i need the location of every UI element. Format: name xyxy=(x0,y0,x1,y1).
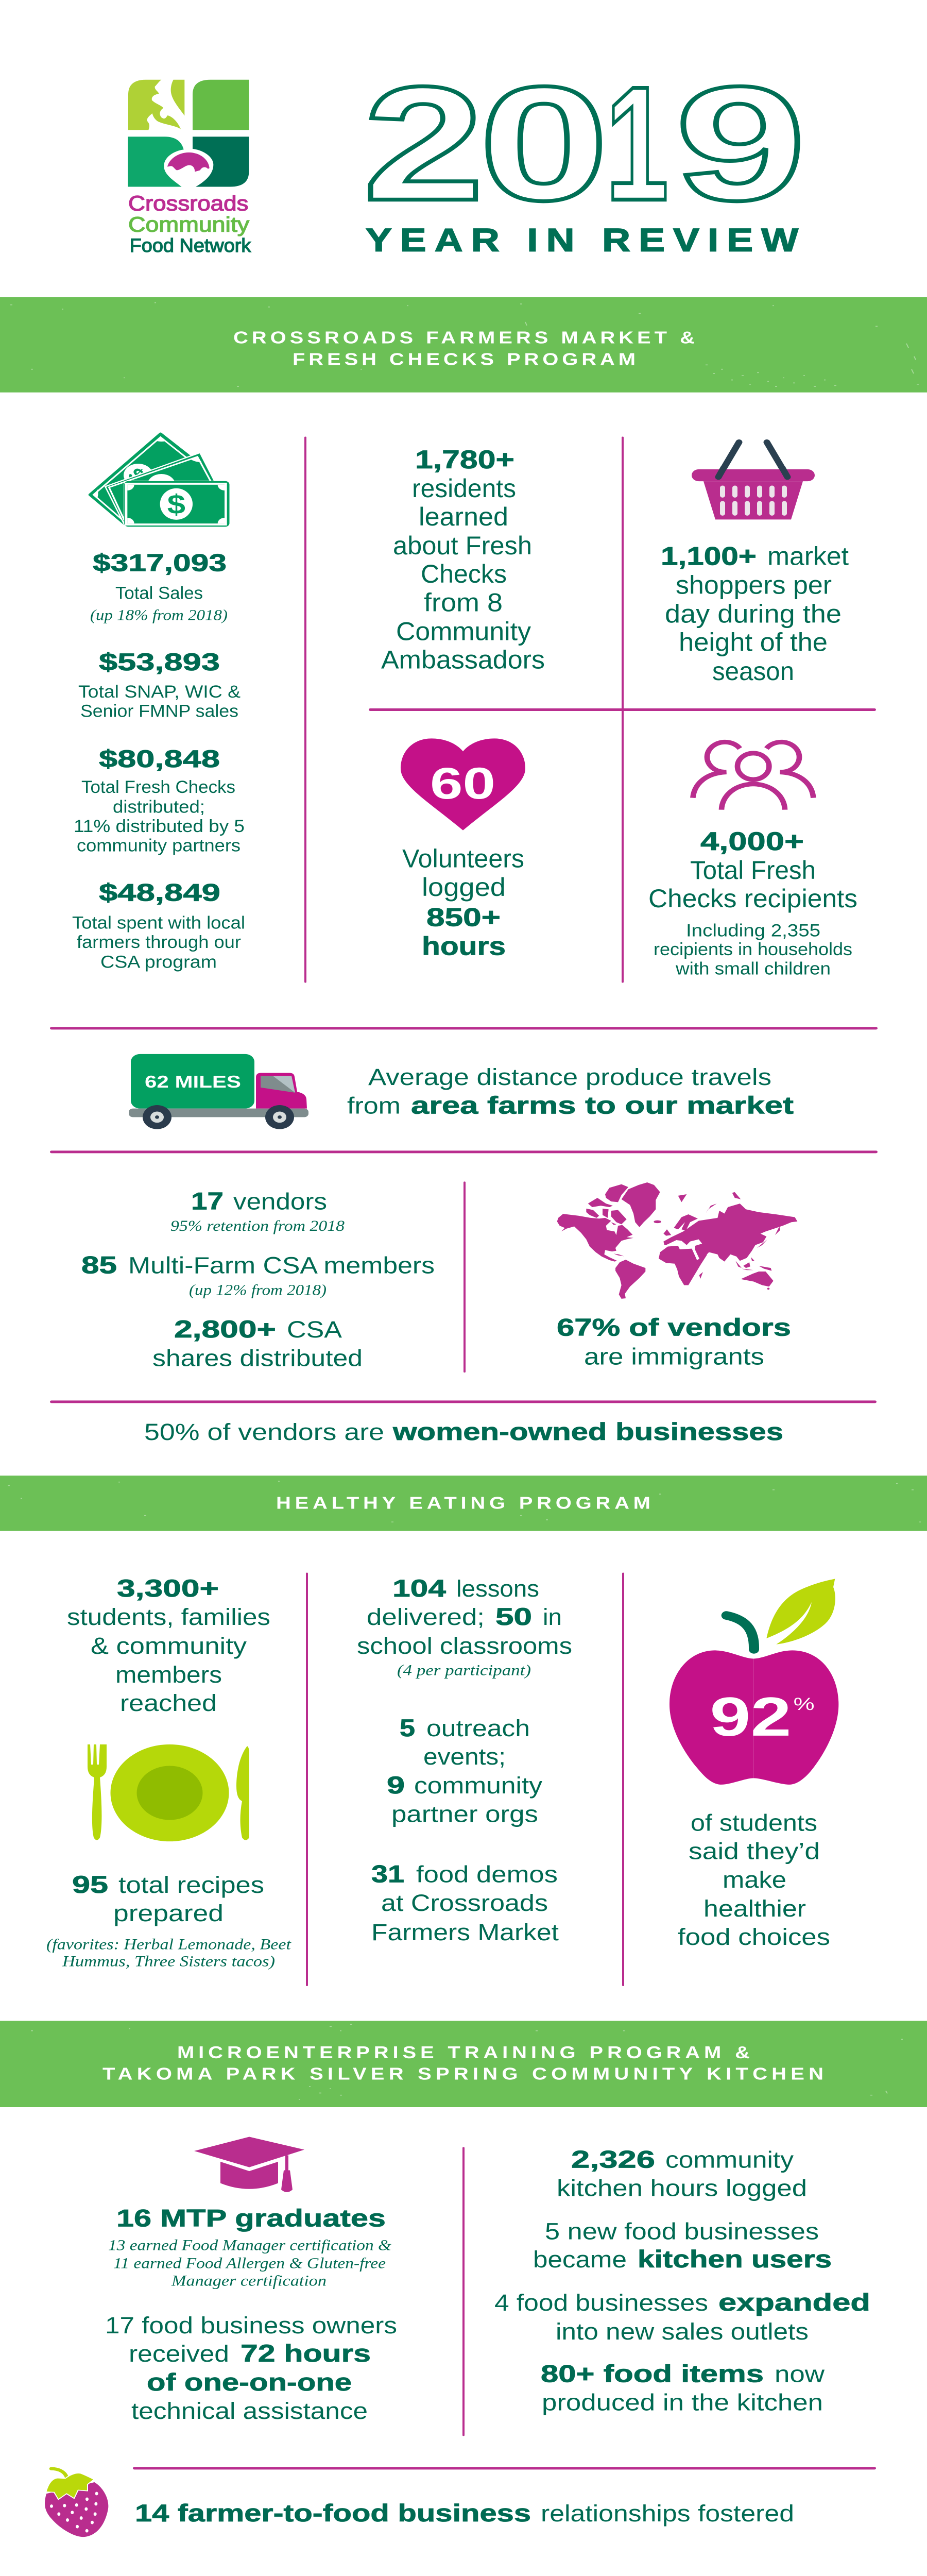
stat: spent with local farmers: Total spent with local xyxy=(72,913,245,933)
icon: apple with 92% xyxy=(670,1579,838,1785)
stat: lessons delivered xyxy=(357,1575,572,1679)
panel: healthy eating stats xyxy=(46,1573,838,1985)
panel: farmers market stats xyxy=(72,434,874,982)
stat: new kitchen users: 5 new food businesses xyxy=(545,2218,819,2245)
title: Year in Review: YEAR IN REVIEW xyxy=(366,222,798,258)
stat: total sales: (up 18% from 2018) xyxy=(90,606,228,623)
stat: businesses expanded: 4 food businesses xyxy=(494,2290,708,2316)
stat: technical assistance: of one-on-one xyxy=(147,2369,352,2396)
stat: people reached xyxy=(67,1575,270,1716)
stat: food demos: food demos xyxy=(416,1861,558,1887)
stat: recipes prepared xyxy=(46,1872,291,1970)
stat: SNAP, WIC and FMNP sales xyxy=(78,649,241,721)
stat: people reached: 3,300+ xyxy=(117,1575,219,1602)
icon: plate, fork and knife xyxy=(88,1744,249,1841)
stat: market shoppers per day: height of the xyxy=(679,628,828,656)
stat: students making healthier choices: said they’d xyxy=(689,1838,820,1864)
title: 2019 outlined numerals: 0 xyxy=(479,53,609,234)
text: average distance produce travels: from xyxy=(347,1093,401,1119)
stat: outreach events and partner orgs: 9 xyxy=(387,1772,405,1799)
stat: spent with local farmers: CSA program xyxy=(100,952,217,972)
stat: community kitchen hours xyxy=(557,2146,807,2201)
stat: students making healthier choices: healthier xyxy=(703,1895,806,1922)
stat: residents learned about Fresh Checks: Checks xyxy=(421,560,507,588)
stat: technical assistance: technical assistance xyxy=(131,2398,368,2424)
stat: vendors: 95% retention from 2018 xyxy=(170,1217,345,1234)
stat: community kitchen hours: community xyxy=(665,2147,794,2173)
stat: Fresh Checks recipients: Checks recipients xyxy=(648,884,857,913)
stat: vendors are immigrants: are immigrants xyxy=(584,1344,764,1369)
banner: Microenterprise Training Program & Community Kitchen xyxy=(0,2021,927,2107)
banner: Crossroads Farmers Market & Fresh Checks Program: FRESH CHECKS PROGRAM xyxy=(293,349,636,369)
stat: technical assistance xyxy=(105,2312,397,2424)
stat: food demos: Farmers Market xyxy=(371,1919,559,1945)
stat: outreach events and partner orgs xyxy=(387,1715,542,1827)
stat: market shoppers per day: day during the xyxy=(665,599,842,628)
stat: CSA shares distributed: shares distributed xyxy=(152,1345,363,1371)
stat: technical assistance: 17 food business owners xyxy=(105,2312,397,2338)
stat: technical assistance: 72 hours xyxy=(241,2341,371,2367)
stat: spent with local farmers: $48,849 xyxy=(99,879,220,906)
stat: businesses expanded xyxy=(494,2289,870,2345)
stat: volunteers logged hours xyxy=(402,844,524,960)
stat: food demos xyxy=(371,1861,559,1945)
stat: technical assistance: received xyxy=(129,2341,229,2367)
stat: MTP graduates xyxy=(108,2205,391,2289)
stat: market shoppers per day xyxy=(661,541,849,686)
stat: food demos: 31 xyxy=(371,1861,404,1888)
stat: Fresh Checks recipients: recipients in households xyxy=(654,939,852,959)
stat: new kitchen users: kitchen users xyxy=(638,2246,832,2273)
stat: lessons delivered: lessons xyxy=(456,1575,539,1602)
stat: recipes prepared: total recipes xyxy=(118,1872,264,1898)
stat: vendors are immigrants: 67% of vendors xyxy=(557,1314,791,1341)
stat: residents learned about Fresh Checks: Community xyxy=(396,617,531,646)
stat: students making healthier choices: make xyxy=(723,1867,786,1893)
stat: market shoppers per day: shoppers per xyxy=(676,570,832,599)
stat: Fresh Checks distributed: distributed; xyxy=(113,797,205,817)
stat: Fresh Checks distributed xyxy=(74,746,245,855)
stat: vendors: vendors xyxy=(233,1189,327,1214)
stat: residents learned about Fresh Checks: learned xyxy=(419,502,508,531)
stat: CSA shares distributed: CSA xyxy=(287,1316,342,1343)
stat: lessons delivered: (4 per participant) xyxy=(397,1662,531,1679)
icon: stack of money: $ xyxy=(124,464,149,486)
text: farmer-to-food business relationships: relationships fostered xyxy=(541,2500,794,2527)
text: average distance produce travels: Average distance produce travels xyxy=(368,1064,771,1090)
stat: Fresh Checks recipients: 4,000+ xyxy=(700,827,804,856)
icon: shopping basket xyxy=(692,442,815,519)
stat: people reached: reached xyxy=(120,1690,217,1716)
stat: outreach events and partner orgs: outreach xyxy=(426,1715,530,1741)
stat: volunteers logged hours: Volunteers xyxy=(402,844,524,873)
stat: students making healthier choices: food choices xyxy=(678,1924,830,1950)
banner: Healthy Eating Program xyxy=(0,1476,927,1531)
stat: students making healthier choices: of students xyxy=(691,1810,817,1836)
stat: Fresh Checks recipients xyxy=(648,827,857,978)
stat: community kitchen hours: 2,326 xyxy=(571,2146,655,2173)
stat: Multi-Farm CSA members: 85 xyxy=(81,1252,117,1279)
stat: recipes prepared: prepared xyxy=(113,1900,224,1926)
text: average distance produce travels: area farms to our market xyxy=(411,1092,794,1120)
stat: Fresh Checks recipients: with small children xyxy=(675,959,831,978)
text: farmer-to-food business relationships: 14 farmer-to-food business xyxy=(135,2500,531,2527)
stat: Fresh Checks distributed: community partners xyxy=(77,836,241,855)
logo: Crossroads Community Food Network: Community xyxy=(128,212,249,236)
stat: people reached: students, families xyxy=(67,1604,270,1630)
icon: heart with 60 xyxy=(401,738,525,831)
icon: heart with 60: 60 xyxy=(430,758,495,808)
stat: total sales: $317,093 xyxy=(93,550,227,577)
stat: food items produced xyxy=(541,2361,825,2415)
stat: businesses expanded: expanded xyxy=(718,2289,870,2316)
stat: food demos: at Crossroads xyxy=(381,1890,548,1916)
stat: recipes prepared: (favorites: Herbal Lemonade, Beet xyxy=(46,1936,291,1953)
stat: volunteers logged hours: logged xyxy=(422,873,506,902)
stat: residents learned about Fresh Checks: about Fresh xyxy=(393,531,532,560)
panel: microenterprise and kitchen stats xyxy=(105,2137,870,2435)
stat: outreach events and partner orgs: 5 xyxy=(400,1715,415,1742)
stat: residents learned about Fresh Checks: 1,780+ xyxy=(415,445,514,474)
stat: total sales: Total Sales xyxy=(115,583,203,603)
banner: Microenterprise Training Program & Community Kitchen: TAKOMA PARK SILVER SPRING COMMUNITY KITCHEN xyxy=(102,2064,823,2083)
stat: total sales xyxy=(90,550,228,623)
stat: Fresh Checks recipients: Total Fresh xyxy=(690,856,816,885)
text: average distance produce travels xyxy=(347,1064,794,1120)
stat: MTP graduates: 16 MTP graduates xyxy=(116,2205,386,2232)
title: 2019 outlined numerals: 9 xyxy=(675,53,806,234)
stat: residents learned about Fresh Checks xyxy=(381,445,545,674)
title: 2019 outlined numerals xyxy=(363,53,806,234)
stat: SNAP, WIC and FMNP sales: $53,893 xyxy=(99,649,220,676)
icon: strawberry xyxy=(45,2469,108,2537)
stat: vendors xyxy=(170,1188,345,1234)
stat: outreach events and partner orgs: partner orgs xyxy=(391,1801,538,1827)
stat: CSA shares distributed xyxy=(152,1316,363,1371)
title: 2019 outlined numerals: 2 xyxy=(363,53,484,234)
stat: community kitchen hours: kitchen hours logged xyxy=(557,2175,807,2201)
stat: residents learned about Fresh Checks: Ambassadors xyxy=(381,645,545,674)
stat: new kitchen users: became xyxy=(533,2246,627,2273)
text: women-owned businesses: 50% of vendors are xyxy=(144,1419,384,1445)
text: women-owned businesses xyxy=(144,1418,783,1446)
stat: students making healthier choices xyxy=(678,1810,830,1950)
stat: residents learned about Fresh Checks: residents xyxy=(412,474,516,503)
logo: Crossroads Community Food Network: Crossroads xyxy=(128,191,248,215)
stat: food items produced: now xyxy=(775,2361,825,2387)
stat: Multi-Farm CSA members: Multi-Farm CSA members xyxy=(128,1252,435,1279)
stat: lessons delivered: school classrooms xyxy=(357,1633,572,1659)
logo: Crossroads Community Food Network xyxy=(128,80,251,256)
stat: Multi-Farm CSA members xyxy=(81,1252,435,1298)
stat: spent with local farmers: farmers through our xyxy=(77,932,241,952)
panel: vendors and CSA xyxy=(81,1182,797,1371)
icon: world map xyxy=(557,1182,797,1299)
stat: lessons delivered: in xyxy=(543,1604,562,1630)
stat: lessons delivered: 50 xyxy=(495,1604,532,1631)
stat: MTP graduates: 13 earned Food Manager certification & xyxy=(108,2236,391,2253)
stat: Fresh Checks recipients: Including 2,355 xyxy=(686,921,820,940)
stat: volunteers logged hours: 850+ xyxy=(426,903,501,931)
icon: delivery truck, 62 miles: 62 MILES xyxy=(145,1072,241,1091)
stat: food items produced: 80+ food items xyxy=(541,2361,764,2387)
stat: lessons delivered: 104 xyxy=(392,1575,446,1602)
icon: group of people xyxy=(693,742,813,810)
title: 2019 outlined numerals: 1 xyxy=(606,53,668,234)
icon: delivery truck, 62 miles xyxy=(129,1054,308,1129)
stat: spent with local farmers xyxy=(72,879,245,972)
stat: MTP graduates: 11 earned Food Allergen & Gluten-free xyxy=(113,2255,386,2272)
stat: recipes prepared: 95 xyxy=(72,1872,108,1899)
stat: vendors are immigrants xyxy=(557,1314,791,1369)
banner: Healthy Eating Program: HEALTHY EATING PROGRAM xyxy=(276,1493,650,1513)
stat: market shoppers per day: 1,100+ xyxy=(661,541,757,571)
banner: Crossroads Farmers Market & Fresh Checks Program: CROSSROADS FARMERS MARKET & xyxy=(233,328,695,347)
stat: people reached: & community xyxy=(91,1633,247,1659)
stat: Fresh Checks distributed: Total Fresh Checks xyxy=(81,777,235,796)
stat: vendors: 17 xyxy=(191,1188,224,1215)
stat: businesses expanded: into new sales outlets xyxy=(556,2318,809,2345)
stat: SNAP, WIC and FMNP sales: Senior FMNP sales xyxy=(80,701,238,721)
banner: Crossroads Farmers Market & Fresh Checks Program xyxy=(0,297,927,393)
icon: apple with 92%: % xyxy=(794,1694,815,1714)
stat: outreach events and partner orgs: events; xyxy=(423,1743,506,1770)
stat: residents learned about Fresh Checks: from 8 xyxy=(424,588,503,617)
icon: stack of money: $ xyxy=(167,489,185,520)
stat: CSA shares distributed: 2,800+ xyxy=(174,1316,276,1343)
text: farmer-to-food business relationships xyxy=(135,2500,794,2527)
stat: recipes prepared: Hummus, Three Sisters tacos) xyxy=(62,1953,275,1970)
stat: market shoppers per day: market xyxy=(767,541,849,571)
stat: SNAP, WIC and FMNP sales: Total SNAP, WIC & xyxy=(78,682,241,701)
stat: Fresh Checks distributed: 11% distributed by 5 xyxy=(74,816,245,836)
stat: market shoppers per day: season xyxy=(712,657,794,686)
icon: apple with 92%: 92 xyxy=(710,1686,792,1748)
stat: new kitchen users xyxy=(533,2218,832,2273)
text: women-owned businesses: women-owned businesses xyxy=(392,1418,783,1446)
stat: outreach events and partner orgs: community xyxy=(414,1772,542,1799)
stat: people reached: members xyxy=(115,1662,222,1688)
icon: graduation cap xyxy=(194,2137,304,2192)
stat: MTP graduates: Manager certification xyxy=(171,2272,327,2289)
stat: Multi-Farm CSA members: (up 12% from 2018) xyxy=(189,1281,327,1298)
stat: Fresh Checks distributed: $80,848 xyxy=(99,746,220,773)
stat: lessons delivered: delivered; xyxy=(367,1604,485,1630)
banner: Microenterprise Training Program & Community Kitchen: MICROENTERPRISE TRAINING PROGRAM & xyxy=(177,2043,750,2062)
logo: Crossroads Community Food Network: Food Network xyxy=(130,234,251,256)
stat: volunteers logged hours: hours xyxy=(422,931,506,960)
stat: food items produced: produced in the kitchen xyxy=(542,2389,823,2415)
icon: stack of money xyxy=(90,434,230,527)
